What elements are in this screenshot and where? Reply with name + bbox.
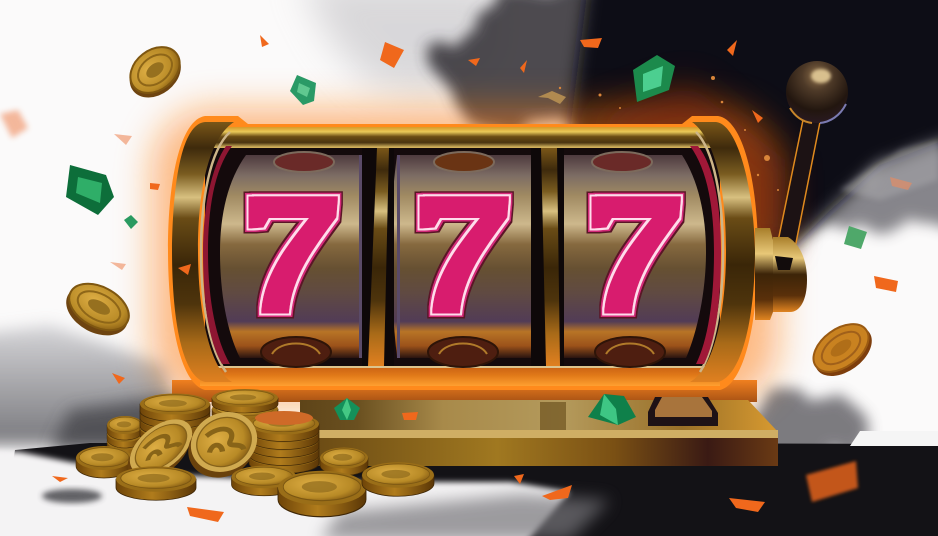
flat coin right xyxy=(362,462,434,496)
coin stack front right xyxy=(249,411,319,474)
digit seven three: 7 xyxy=(578,161,690,347)
background: grey smoke lower right xyxy=(700,385,865,480)
digit seven two: 7 xyxy=(406,161,518,347)
emerald faded right xyxy=(844,226,867,249)
faded confetti xyxy=(0,110,912,270)
ember sparks xyxy=(538,76,779,191)
tilted coin large xyxy=(177,401,269,488)
reel two xyxy=(391,152,535,367)
flying coin top left xyxy=(119,38,191,107)
coin stack far left xyxy=(107,416,143,464)
flying coin left xyxy=(58,274,138,345)
flat coin large front xyxy=(278,471,366,517)
reel three xyxy=(560,152,706,367)
flying coin right xyxy=(804,314,881,386)
lever ball xyxy=(786,61,848,123)
emerald top centre xyxy=(290,75,316,105)
machine glowing frame xyxy=(168,116,758,390)
emerald small left xyxy=(124,215,138,229)
coin stack back right xyxy=(212,389,278,424)
lever arm xyxy=(775,120,820,258)
gem on shelf left xyxy=(334,398,360,420)
spin button xyxy=(648,397,718,426)
background: dark ink smoke top right xyxy=(300,0,938,260)
background: grey smoke lower left xyxy=(0,325,180,450)
floor: dark band and white ground xyxy=(0,431,938,536)
machine right gold drum cap xyxy=(690,122,755,382)
coin pile xyxy=(76,389,434,517)
machine left gold drum cap xyxy=(172,122,234,382)
flat coin behind right xyxy=(320,448,368,476)
reel dividers xyxy=(362,148,564,366)
emerald left xyxy=(66,165,114,215)
coin stack back left xyxy=(140,394,210,446)
lever hub xyxy=(755,228,807,320)
emerald top right xyxy=(633,55,675,102)
slot machine xyxy=(168,61,848,466)
digit seven one: 7 xyxy=(235,161,347,347)
machine inner crimson trim xyxy=(203,146,721,364)
machine base xyxy=(172,380,778,466)
gem on shelf right xyxy=(588,394,636,425)
flat coin front middle xyxy=(232,466,296,496)
orange glow behind machine xyxy=(152,85,785,404)
flat coin front left xyxy=(116,466,196,500)
reel one xyxy=(220,152,366,367)
tilted coin left xyxy=(116,408,204,491)
flat coin far left xyxy=(76,446,132,478)
